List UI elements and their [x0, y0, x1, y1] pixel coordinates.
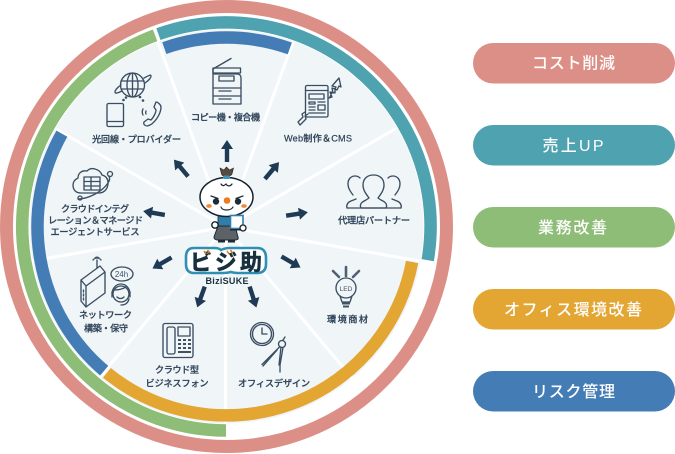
wheel background disc: [30, 30, 424, 424]
phone keypad: [178, 339, 191, 353]
icon: web page with arrow: [298, 78, 341, 125]
label: クラウド型: [155, 364, 199, 375]
label: 光回線・プロバイダー: [92, 134, 181, 144]
mascot kimono top: [218, 214, 234, 228]
ring arc: operations improvement: [22, 35, 226, 431]
arrows: [142, 140, 309, 309]
pill: operations improvement: [473, 207, 675, 248]
arrow: left: [142, 205, 166, 221]
segment: copier: [191, 58, 260, 122]
segment: partner: [338, 175, 410, 226]
label line 3: エージェントサービス: [50, 226, 140, 237]
wheel diagram: [6, 6, 446, 446]
mascot feet: [218, 240, 235, 242]
pill: risk management: [473, 371, 675, 412]
label line 2: 構築・保守: [84, 322, 128, 334]
icon: globe, tablet and phone: [107, 73, 161, 126]
icon: clock and compass: [250, 322, 286, 372]
icon: three people: [347, 175, 401, 208]
pill: sales up: [473, 125, 675, 166]
segment: network: [79, 257, 133, 334]
icon: desk phone: [163, 324, 193, 358]
arrow: down left: [192, 285, 210, 309]
arrow: up right: [260, 158, 284, 183]
pill: risk management: リスク管理: [532, 383, 615, 401]
mascot crown: [220, 167, 234, 176]
arrow: up left: [169, 156, 193, 180]
pill: office environment improvement: [473, 289, 675, 330]
ring arc: risk management, top: [164, 38, 290, 48]
pill: office environment improvement: オフィス環境改善: [504, 301, 642, 319]
label: Web制作＆CMS: [284, 132, 352, 144]
legend: [473, 43, 675, 412]
arrow: lower right: [278, 251, 304, 273]
mascot head: [200, 178, 253, 216]
pill: operations improvement: 業務改善: [538, 219, 607, 237]
mascot hair tie: [223, 176, 230, 179]
mascot: [200, 167, 253, 242]
segment: environment products: [327, 267, 368, 324]
segment: office design: [238, 322, 310, 388]
icon: LED bulb: LED: [340, 286, 353, 293]
logo subtext: BiziSUKE: [206, 276, 248, 286]
label: オフィスデザイン: [238, 378, 310, 388]
ring arc: risk management, left: [37, 134, 104, 371]
mascot face: [206, 184, 247, 210]
ring arc: office environment: [107, 262, 412, 415]
mascot hakama body: [214, 226, 238, 240]
icon: copier: [213, 58, 241, 104]
label: 代理店パートナー: [338, 214, 410, 226]
connection dots: [122, 96, 144, 102]
label: 環境商材: [327, 314, 368, 324]
logo: BiziSUKE: [186, 248, 266, 286]
pill: cost reduction: [473, 43, 675, 84]
arrow: down right: [244, 285, 262, 309]
label line 2: レーション＆マネージド: [48, 216, 143, 226]
mascot arm left: [212, 222, 218, 228]
arrow: right: [285, 206, 309, 222]
ring arc: sales up: [158, 22, 431, 260]
icon: router and support: 24h: [115, 270, 128, 279]
label line 2: ビジネスフォン: [146, 378, 208, 388]
ring: cost reduction: [6, 6, 446, 446]
logo accents: [204, 250, 232, 254]
segment: cloud phone: [146, 324, 208, 388]
pill: sales up: 売上UP: [542, 137, 604, 155]
arrow: lower left: [149, 252, 175, 274]
mascot laptop: [230, 216, 246, 231]
logo badge: [186, 248, 266, 273]
segment: fiber provider: [92, 73, 181, 144]
label: コピー機・複合機: [191, 112, 260, 122]
label: ネットワーク: [79, 310, 132, 320]
pill: cost reduction: コスト削減: [532, 54, 615, 72]
segment: cloud integration: [48, 169, 143, 237]
icon: cloud server: [73, 169, 112, 200]
logo wordmark: ビジ助: [190, 250, 262, 275]
label: クラウドインテグ: [61, 203, 129, 214]
segment: web: [284, 78, 352, 144]
arrow: up: [221, 140, 233, 162]
